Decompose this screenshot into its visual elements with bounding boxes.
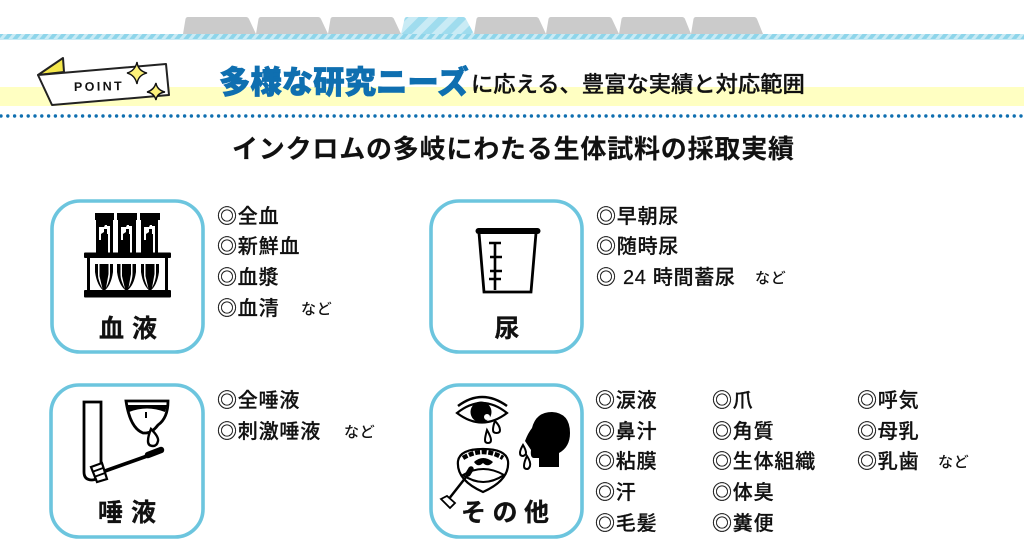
panel: saliva (51, 385, 203, 537)
panel: urine (431, 201, 582, 352)
list: others: ◎爪 (712, 389, 754, 412)
title: 多様な研究ニーズ (219, 64, 469, 100)
list: urine: など (755, 270, 787, 287)
POINT badge (38, 58, 169, 105)
list: saliva (217, 389, 376, 443)
list: others: ◎母乳 (857, 420, 919, 443)
list: others: ◎乳歯 (857, 450, 919, 473)
list: others: ◎鼻汁 (595, 420, 657, 443)
blood card (52, 201, 203, 352)
list: blood: ◎全血 (217, 205, 279, 228)
list: others: ◎涙液 (595, 389, 657, 412)
others card (431, 385, 582, 537)
POINT badge: POINT (74, 79, 124, 94)
striped band (0, 34, 1024, 40)
title (219, 64, 805, 100)
list: others (595, 389, 970, 535)
list: blood (217, 205, 333, 320)
list: blood: ◎血漿 (217, 266, 279, 289)
label: others: その他 (461, 499, 556, 527)
label: urine: 尿 (494, 315, 520, 343)
list: saliva: など (344, 424, 376, 441)
list: others: ◎粘膜 (595, 450, 657, 473)
list: saliva: ◎刺激唾液 (217, 420, 321, 443)
list: urine: ◎随時尿 (596, 235, 679, 258)
urine card (431, 201, 582, 352)
label: blood: 血液 (99, 315, 165, 343)
list: others: など (938, 454, 970, 471)
list: blood: ◎血清 (217, 297, 279, 320)
title: に応える、豊富な実績と対応範囲 (471, 72, 805, 97)
icon: measuring cup (476, 228, 540, 292)
icon: saliva tube and swab (84, 401, 168, 482)
list: others: ◎糞便 (712, 512, 774, 535)
icon: test tubes (84, 213, 171, 298)
subtitle: インクロムの多岐にわたる生体試料の採取実績 (232, 134, 795, 164)
list: others: ◎呼気 (857, 389, 919, 412)
icon: mouth and swab (441, 449, 508, 508)
list: urine (596, 205, 787, 289)
yellow heading band (0, 87, 1024, 106)
label: saliva: 唾液 (98, 499, 164, 527)
list: others: ◎生体組織 (712, 450, 816, 473)
list: blood: ◎新鮮血 (217, 235, 300, 258)
list: others: ◎角質 (712, 420, 774, 443)
list: others: ◎毛髪 (595, 512, 657, 535)
dotted divider (1, 114, 1024, 118)
icon: eye (457, 397, 507, 443)
panel: blood (52, 201, 203, 352)
list: others: ◎汗 (595, 481, 637, 504)
list: urine: ◎早朝尿 (596, 205, 679, 228)
list: blood: など (301, 301, 333, 318)
list: urine: ◎ 24 時間蓄尿 (596, 266, 736, 289)
panel: others (431, 385, 582, 537)
list: others: ◎体臭 (712, 481, 774, 504)
icon: head with nose drops (520, 412, 570, 469)
list: saliva: ◎全唾液 (217, 389, 300, 412)
saliva card (51, 385, 203, 537)
navigation tabs (183, 17, 763, 34)
